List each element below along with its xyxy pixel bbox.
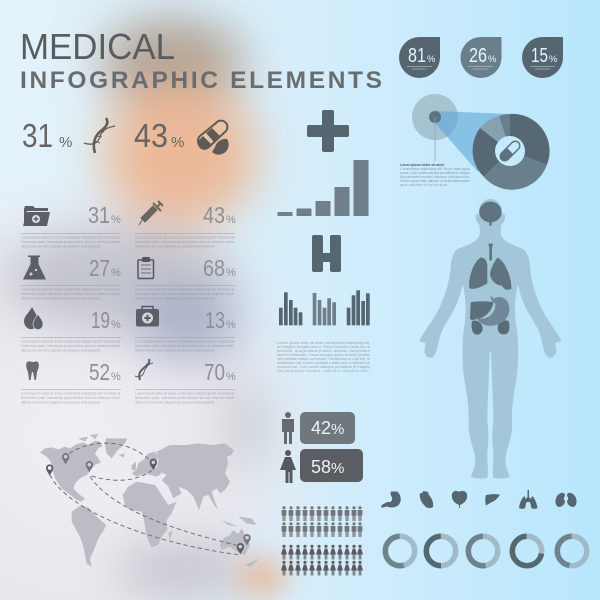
top stats with dna and pill icons [22, 117, 229, 155]
paragraph: tincidunt. Suspendisse potenti. Aenean consectetur [277, 348, 371, 353]
grid item: tooth 52% [26, 359, 121, 385]
ring 5 [555, 534, 589, 568]
donut segments [473, 114, 550, 190]
cone [435, 111, 510, 172]
continents [40, 434, 260, 567]
grid item: syringe 43%: 43 [203, 202, 225, 228]
grid rules and lorem text: ultrices est vel nunc aliquam eu posuere urna placerat. [135, 296, 215, 300]
drop 81% [399, 37, 440, 78]
grid rules and lorem text: fermentum justo. Maecenas porta ultricies nisl non vehicula. Morbi [21, 396, 120, 400]
grid rules and lorem text: ultrices est vel nunc aliquam eu posuere urna placerat. [21, 244, 101, 248]
grid rules and lorem text: fermentum justo. Maecenas porta ultricies nisl non vehicula. Morbi [135, 396, 234, 400]
icon grid panel [21, 201, 236, 404]
human body figure [419, 199, 562, 479]
grid rules and lorem text: Lorem ipsum dolor sit amet, consectetur adipiscing elit. Vivamus at [135, 340, 234, 344]
grid rules and lorem text: ultrices est vel nunc aliquam eu posuere urna placerat. [135, 244, 215, 248]
lens circle [412, 94, 458, 140]
organ icons row [382, 490, 577, 509]
grid item: folder 31% [23, 202, 121, 228]
progress rings [382, 533, 589, 569]
paragraph: dis parturient montes, nascetur ridiculus mus. [277, 368, 370, 373]
grid item: drops 19% [24, 307, 121, 333]
grid item: tooth 52%: % [111, 371, 121, 383]
grid rules and lorem text: Lorem ipsum dolor sit amet, consectetur adipiscing elit. Vivamus at [21, 392, 120, 396]
grid item: folder 31%: % [111, 214, 121, 226]
grid item: clipboard 68%: 68 [203, 255, 225, 281]
grid rules and lorem text: fermentum justo. Maecenas porta ultricies nisl non vehicula. Morbi [21, 240, 120, 244]
icon: woman [280, 450, 296, 483]
top stats with dna and pill icons: % [59, 134, 72, 151]
dashed routes [50, 443, 241, 555]
grid item: clipboard 68% [138, 255, 236, 281]
caption: purus. Cum sociis natoque penatibus et magnis [400, 171, 470, 175]
organs [469, 202, 511, 335]
grid rules and lorem text: ultrices est vel nunc aliquam eu posuere urna placerat. [21, 348, 101, 352]
brain [479, 202, 502, 226]
ring 3 [466, 534, 500, 568]
grid item: flask 27% [23, 255, 121, 281]
world map [40, 434, 260, 567]
grid item: tooth 52%: 52 [89, 359, 110, 385]
title [20, 26, 382, 94]
paragraph: laoreet venenatis. Fusce congue quam et ante lobortis [277, 352, 370, 357]
paragraph: sed facilisis metus commodo. Vestibulum eu dui elit, ut [277, 356, 371, 361]
paragraph: ac fringilla fringilla libero. Etiam blandit mollis dui at [277, 344, 371, 349]
right lung [490, 258, 511, 290]
title: INFOGRAPHIC ELEMENTS [20, 67, 382, 94]
paragraph [277, 340, 371, 373]
icon: leaf organ [452, 491, 467, 508]
grid rules and lorem text: ultrices est vel nunc aliquam eu posuere urna placerat. [21, 296, 101, 300]
icon: man [282, 412, 294, 444]
grid item: clipboard 68%: % [226, 267, 236, 279]
caption: Lorem ipsum dolor sit amet [400, 163, 445, 167]
paragraph: Lorem ipsum dolor sit amet, consectetur adipiscing elit, [277, 340, 370, 345]
ring 1 [382, 533, 418, 569]
grid rules and lorem text [21, 234, 235, 404]
icon: medical cross [307, 110, 349, 152]
top stats with dna and pill icons: 43 [134, 117, 168, 154]
icon: liver [485, 494, 500, 506]
grid rules and lorem text: fermentum justo. Maecenas porta ultricies nisl non vehicula. Morbi [135, 344, 234, 348]
grid rules and lorem text: Lorem ipsum dolor sit amet, consectetur adipiscing elit. Vivamus at [135, 288, 234, 292]
grid rules and lorem text: Lorem ipsum dolor sit amet, consectetur adipiscing elit. Vivamus at [135, 236, 234, 240]
grid item: drops 19%: % [111, 319, 121, 331]
grid item: medical kit 13%: 13 [205, 307, 225, 333]
grid item: flask 27%: % [111, 267, 121, 279]
paragraph: vestibulum elit. Donec suscipit mattis arcu a ultricies sit [277, 360, 371, 365]
caption: Consectetur adipiscing elit. Nunc vitae ligula [400, 167, 471, 171]
body silhouette [419, 199, 562, 479]
grid item: dna 70% [135, 359, 236, 385]
drop 15% [522, 37, 563, 78]
icon: dna [84, 118, 115, 153]
grid rules and lorem text: Lorem ipsum dolor sit amet, consectetur adipiscing elit. Vivamus at [135, 392, 234, 396]
female rows [281, 545, 363, 576]
top stats with dna and pill icons: 31 [22, 117, 53, 154]
trachea [488, 244, 493, 260]
stomach [476, 295, 509, 326]
grid item: syringe 43%: % [226, 214, 236, 226]
lens dot [429, 111, 441, 123]
grid item: drops 19%: 19 [91, 307, 110, 333]
box 42%: 42% [311, 418, 344, 438]
icon: pill and tablet [198, 121, 229, 155]
grid rules and lorem text: fermentum justo. Maecenas porta ultricies nisl non vehicula. Morbi [21, 292, 120, 296]
pins [46, 453, 251, 555]
people pictogram [281, 506, 363, 576]
drop 26%: % [488, 54, 497, 65]
grid rules and lorem text: ultrices est vel nunc aliquam eu posuere urna placerat. [21, 400, 101, 404]
grid rules and lorem text: Lorem ipsum dolor sit amet, consectetur adipiscing elit. Vivamus at [21, 236, 120, 240]
drop 26% [461, 37, 502, 78]
icon: kidneys [555, 493, 577, 507]
grid rules and lorem text: ultrices est vel nunc aliquam eu posuere urna placerat. [135, 348, 215, 352]
icon: lungs [519, 490, 538, 509]
gender stats [280, 412, 363, 483]
kidneys [472, 320, 483, 335]
icon: pill in donut [498, 139, 522, 163]
grid item: folder 31%: 31 [88, 202, 110, 228]
grid item: dna 70%: % [226, 371, 236, 383]
grid item: medical kit 13% [136, 306, 236, 333]
drop 26%: 26 [469, 45, 487, 67]
top stats with dna and pill icons: % [171, 134, 184, 151]
box 58%: 58% [311, 457, 344, 477]
caption [400, 163, 471, 187]
icon: hospital H [312, 235, 341, 272]
left lung [469, 258, 487, 289]
drop 81%: % [427, 54, 436, 65]
bar charts: three small [279, 290, 370, 325]
grid rules and lorem text: fermentum justo. Maecenas porta ultricies nisl non vehicula. Morbi [21, 344, 120, 348]
grid item: dna 70%: 70 [204, 359, 225, 385]
caption: quis sodales id enim duis. [400, 183, 448, 187]
grid item: syringe 43% [139, 201, 236, 228]
paragraph: rhoncus est. Cum sociis natoque penatibus et magnis [277, 364, 370, 369]
male rows [282, 506, 362, 537]
drop 15%: 15 [531, 45, 548, 67]
grid rules and lorem text: fermentum justo. Maecenas porta ultricies nisl non vehicula. Morbi [135, 292, 234, 296]
ring 4 [510, 534, 544, 568]
caption: Donec quam felis, ultricies ut amet ullamcorper [400, 179, 471, 183]
grid item: flask 27%: 27 [89, 255, 110, 281]
grid item: medical kit 13%: % [226, 319, 236, 331]
grid rules and lorem text: ultrices est vel nunc aliquam eu posuere urna placerat. [135, 400, 215, 404]
magnifier and donut chart [400, 94, 550, 190]
icon: heart [420, 491, 433, 508]
title: MEDICAL [20, 26, 175, 67]
caption: dis parturient montes nascetur ridiculus mus. [400, 175, 470, 179]
liver [470, 301, 493, 320]
ring 2 [426, 536, 456, 566]
stat drops [399, 37, 563, 78]
icon: stomach [382, 491, 401, 508]
grid rules and lorem text: Lorem ipsum dolor sit amet, consectetur adipiscing elit. Vivamus at [21, 288, 120, 292]
pointer line [434, 117, 436, 161]
grid rules and lorem text: Lorem ipsum dolor sit amet, consectetur adipiscing elit. Vivamus at [21, 340, 120, 344]
grid rules and lorem text: fermentum justo. Maecenas porta ultricies nisl non vehicula. Morbi [135, 240, 234, 244]
drop 15%: % [549, 54, 558, 65]
bar chart: rising [278, 160, 368, 216]
drop 81%: 81 [408, 45, 426, 67]
